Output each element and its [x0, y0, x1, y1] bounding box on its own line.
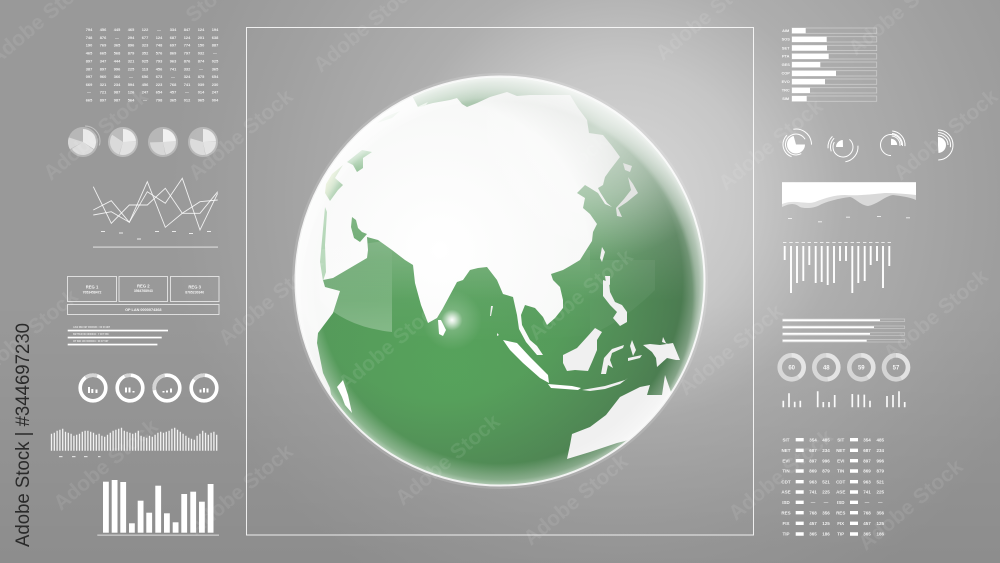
data table top left: —	[143, 97, 147, 102]
horizontal bars panel: SOS	[782, 37, 790, 42]
data table top left: 124	[198, 27, 205, 32]
watermarks: Adobe Stock	[357, 105, 471, 205]
data table bottom right: 879	[822, 469, 830, 474]
pie charts row	[68, 126, 218, 157]
data table bottom right: 485	[822, 437, 830, 442]
data table top left: 960	[100, 74, 106, 79]
gloss and shading layers	[320, 78, 696, 283]
data table top left: 769	[100, 43, 107, 48]
data table top left: 025	[212, 58, 219, 63]
data table bottom right: 365	[809, 532, 817, 537]
data table bottom right: 234	[822, 448, 830, 453]
data table bottom right: 768	[863, 510, 871, 515]
data table top left: 247	[142, 90, 148, 95]
data table bottom right: 741	[863, 490, 871, 495]
data table top left: 004	[212, 97, 219, 102]
data table bottom right: NET	[836, 448, 845, 453]
registers panel: REG 1	[86, 284, 99, 290]
data table bottom right: FIX	[837, 521, 844, 526]
data table bottom right: TIP	[837, 532, 844, 537]
data table top left: 721	[100, 90, 107, 95]
data table bottom right: ISD	[837, 500, 845, 505]
data table bottom right: —	[865, 500, 870, 505]
data table top left: 875	[198, 74, 205, 79]
data table top left: 897	[100, 97, 106, 102]
data table top left: 456	[156, 66, 163, 71]
data table top left: 122	[142, 27, 149, 32]
gauge 2	[113, 371, 147, 405]
area chart	[782, 182, 916, 222]
data table top left: —	[115, 35, 119, 40]
horizontal bars panel: PTA	[782, 54, 790, 59]
data table bottom right: 869	[863, 469, 871, 474]
data table top left: 987	[114, 90, 120, 95]
small bar groups	[783, 391, 905, 407]
data table top left: 194	[212, 27, 219, 32]
watermarks: Adobe Stock	[674, 300, 788, 400]
data table top left: 014	[198, 90, 205, 95]
data table top left: 847	[184, 27, 190, 32]
data table bottom right: 879	[877, 469, 885, 474]
data table top left: 456	[100, 27, 107, 32]
data table top left: 444	[114, 58, 121, 63]
data table top left: 594	[128, 82, 135, 87]
data table top left: 793	[156, 58, 163, 63]
data table bottom right: 365	[863, 532, 871, 537]
data table bottom right: 521	[877, 479, 885, 484]
data table top left: 150	[198, 43, 204, 48]
data table bottom right: 768	[809, 510, 817, 515]
progress text lines: BETTER 00 0000034 : 7 007 566	[73, 333, 109, 336]
data table bottom right	[781, 437, 885, 537]
horizontal bars panel	[781, 28, 877, 101]
data table bottom right: ASE	[836, 490, 845, 495]
data table top left: 445	[114, 27, 121, 32]
data table top left: 797	[184, 51, 190, 56]
progress text lines	[68, 326, 168, 345]
data table top left: 774	[184, 43, 191, 48]
data table bottom right: TIP	[782, 532, 790, 537]
line chart	[93, 178, 218, 248]
data table top left: 576	[156, 51, 163, 56]
data table bottom right: RES	[781, 510, 791, 515]
data table bottom right: ASE	[781, 490, 791, 495]
data table top left: 039	[198, 82, 205, 87]
ring gauges with bars	[75, 370, 222, 406]
data table top left: 201	[198, 35, 205, 40]
data table bottom right: 996	[877, 458, 885, 463]
data table bottom right: SIT	[782, 437, 790, 442]
registers panel: 7053458472	[83, 290, 102, 294]
data table top left: 748	[156, 43, 163, 48]
data table top left: 234	[114, 82, 121, 87]
data table bottom right: 225	[822, 490, 830, 495]
right column	[778, 28, 953, 537]
data table top left: 665	[100, 51, 107, 56]
watermarks: Adobe Stock	[184, 440, 298, 540]
data table bottom right: 125	[877, 521, 885, 526]
data table top left: 124	[184, 35, 191, 40]
islands: Madagascar, Sri Lanka, Sumatra, Java, Borneo, Sulawesi, New Guinea, Australia, Philippines, Japan, Taiwan	[337, 163, 690, 459]
data table bottom right: 485	[877, 437, 885, 442]
data table top left: 879	[128, 51, 135, 56]
data table top left: 876	[100, 35, 107, 40]
data table bottom right: 963	[863, 479, 871, 484]
Black Sea	[347, 150, 372, 172]
data table bottom right: 741	[809, 490, 817, 495]
pie 4	[188, 127, 218, 157]
data table top left: 987	[114, 97, 120, 102]
Persian Gulf	[351, 217, 367, 242]
globe	[292, 73, 706, 489]
ocean	[317, 78, 704, 484]
data table top left: 323	[142, 43, 149, 48]
data table top left: 190	[86, 43, 92, 48]
registers panel: 3564768943	[134, 289, 153, 293]
data table bottom right: 356	[877, 510, 885, 515]
radial icon 4	[923, 130, 953, 160]
data table bottom right: 186	[822, 532, 830, 537]
registers panel: REG 3	[188, 284, 202, 290]
data table top left: 794	[86, 27, 93, 32]
data table top left: 347	[100, 58, 106, 63]
data table bottom right: EVI	[837, 458, 844, 463]
watermarks: Adobe Stock	[214, 250, 328, 350]
data table top left: 025	[142, 58, 149, 63]
data table top left: —	[213, 51, 217, 56]
data table bottom right: —	[824, 500, 829, 505]
watermarks: Adobe Stock	[334, 295, 448, 395]
data table top left: 352	[142, 51, 149, 56]
data table top left: 365	[114, 43, 121, 48]
data table bottom right: 521	[822, 479, 830, 484]
data table top left: 334	[170, 27, 177, 32]
data table top left: 124	[156, 35, 163, 40]
donut 59: 59	[858, 366, 865, 372]
data table bottom right: 869	[809, 469, 817, 474]
data table bottom right: 354	[863, 437, 871, 442]
data table top left: 324	[184, 74, 191, 79]
horizontal bars panel: AIM	[782, 28, 789, 33]
radial icon 1	[778, 127, 814, 162]
data table top left: 568	[114, 51, 121, 56]
data table bottom right: RES	[836, 510, 845, 515]
watermarks: Adobe Stock	[499, 130, 613, 230]
gauge 4	[186, 370, 222, 406]
Red Sea	[320, 207, 327, 281]
data table top left: 965	[198, 97, 205, 102]
data table top left: 321	[100, 82, 107, 87]
data table top left: 225	[128, 66, 135, 71]
data table top left: 673	[156, 74, 163, 79]
data table bottom right: 234	[877, 448, 885, 453]
data table top left: 748	[86, 35, 93, 40]
data table top left: 869	[170, 51, 177, 56]
data table top left: 656	[142, 74, 149, 79]
data table bottom right: CDT	[836, 479, 846, 484]
data table top left: 564	[128, 97, 135, 102]
left column	[52, 27, 222, 536]
waveform chart	[52, 428, 217, 457]
data table top left: 126	[128, 90, 135, 95]
donut 57: 57	[893, 366, 900, 372]
data table top left: —	[129, 74, 133, 79]
data table top left: 874	[198, 58, 205, 63]
data table top left: 113	[142, 66, 149, 71]
data table top left: 897	[100, 66, 106, 71]
data table top left: 332	[184, 66, 191, 71]
data table bottom right: 356	[822, 510, 830, 515]
data table bottom right: 125	[822, 521, 830, 526]
data table top left: 457	[170, 90, 176, 95]
data table top left: 876	[184, 58, 191, 63]
data table bottom right: ISD	[782, 500, 790, 505]
data table top left: 387	[86, 66, 92, 71]
gauge 3	[152, 373, 182, 403]
data table top left: 768	[170, 82, 177, 87]
watermarks: Adobe Stock	[714, 95, 828, 195]
radial icon 2	[827, 131, 859, 163]
data table bottom right: —	[878, 500, 883, 505]
data table top left: 294	[128, 35, 135, 40]
data table top left: —	[171, 74, 175, 79]
pie 1	[68, 126, 100, 157]
data table top left: 097	[86, 74, 92, 79]
horizontal bars panel: SET	[782, 45, 790, 50]
bar chart bottom left	[97, 480, 219, 536]
donut 48: 48	[823, 366, 830, 372]
gauge 1	[75, 370, 111, 406]
data table bottom right: CDT	[781, 479, 791, 484]
data table bottom right: 996	[822, 458, 830, 463]
data table bottom right: EVI	[782, 458, 790, 463]
data table top left: 638	[212, 35, 219, 40]
data table top left: 230	[212, 82, 218, 87]
horizontal bars panel: COP	[781, 71, 790, 76]
data table top left: 677	[142, 35, 148, 40]
data table top left: 366	[114, 74, 121, 79]
data table top left: 321	[128, 58, 135, 63]
data table top left: 741	[170, 66, 177, 71]
horizontal bars panel: TRC	[782, 88, 790, 93]
data table top left: —	[185, 90, 189, 95]
data table top left: —	[199, 66, 203, 71]
data table top left: 223	[156, 82, 163, 87]
data table bottom right: 687	[809, 448, 817, 453]
data table bottom right: 897	[863, 458, 871, 463]
data table top left	[86, 27, 219, 102]
data table bottom right: SIT	[837, 437, 844, 442]
registers panel: OP LAN 0000074368	[125, 308, 162, 312]
data table top left: 032	[198, 51, 205, 56]
watermarks: Adobe Stock	[49, 415, 163, 515]
pie 3	[148, 127, 178, 157]
stock ID vertical text: Adobe Stock | #344697230	[13, 323, 34, 547]
watermarks: Adobe Stock	[879, 265, 993, 365]
registers panel: 8765230340	[185, 290, 204, 294]
progress text lines: AAS 089 097 0000034 : 00 00 987	[73, 326, 111, 329]
arctic strips	[380, 102, 428, 122]
data table top left: 963	[170, 58, 177, 63]
data table top left: 012	[184, 97, 191, 102]
data table bottom right: 457	[863, 521, 871, 526]
horizontal bars panel: GES	[782, 62, 790, 67]
frame around globe	[246, 28, 754, 535]
data table top left: 798	[156, 97, 163, 102]
data table top left: 247	[212, 90, 218, 95]
pie 2	[108, 127, 138, 157]
data table top left: 665	[86, 97, 93, 102]
horizontal bars panel: EVO	[782, 79, 790, 84]
data table top left: 654	[212, 74, 219, 79]
watermarks: Adobe Stock	[184, 85, 298, 185]
data table top left: 697	[170, 43, 176, 48]
data table top left: —	[157, 27, 161, 32]
donut 60: 60	[788, 366, 796, 372]
progress lines	[783, 319, 905, 342]
percent donuts	[780, 355, 908, 379]
land: Eurasia and Africa	[296, 92, 620, 394]
data table top left: 465	[86, 51, 93, 56]
data table bottom right: 963	[809, 479, 817, 484]
watermarks: Adobe Stock	[889, 85, 1000, 185]
data table top left: 456	[142, 82, 149, 87]
data table top left: 669	[86, 82, 93, 87]
data table bottom right: TIN	[782, 469, 790, 474]
data table bottom right: FIX	[782, 521, 790, 526]
watermarks: Adobe Stock	[854, 455, 968, 555]
data table bottom right: TIN	[837, 469, 844, 474]
watermarks: Adobe Stock	[524, 245, 638, 345]
progress text lines: OT 890 100 0000034 : 00 07 567	[73, 340, 109, 343]
horizontal bars panel: SIM	[782, 96, 789, 101]
watermarks: Adobe Stock	[724, 425, 838, 525]
data table bottom right: 457	[809, 521, 817, 526]
registers panel: REG 2	[137, 284, 150, 288]
watermarks: Adobe Stock	[39, 85, 153, 185]
data table top left: 365	[170, 97, 177, 102]
data table top left: 887	[212, 43, 218, 48]
data table top left: 365	[212, 66, 219, 71]
data table top left: 996	[114, 66, 121, 71]
data table bottom right: NET	[782, 448, 791, 453]
radial icon 3	[876, 130, 906, 160]
data table top left: 687	[170, 35, 176, 40]
data table top left: 896	[128, 43, 135, 48]
data table bottom right: —	[811, 500, 816, 505]
data table bottom right: 225	[877, 490, 885, 495]
registers panel	[68, 276, 219, 314]
data table top left: —	[87, 90, 91, 95]
data table top left: 897	[86, 58, 92, 63]
watermarks: Adobe Stock	[519, 450, 633, 550]
data table top left: 465	[128, 27, 135, 32]
Mediterranean	[325, 165, 343, 201]
data table bottom right: 186	[877, 532, 885, 537]
hanging bars chart	[783, 242, 891, 293]
data table bottom right: 354	[809, 437, 817, 442]
data table top left: 741	[184, 82, 191, 87]
data table top left: 654	[156, 90, 163, 95]
data table bottom right: 687	[863, 448, 871, 453]
data table bottom right: 897	[809, 458, 817, 463]
watermarks: Adobe Stock	[391, 410, 505, 510]
radial icons row	[778, 127, 953, 163]
